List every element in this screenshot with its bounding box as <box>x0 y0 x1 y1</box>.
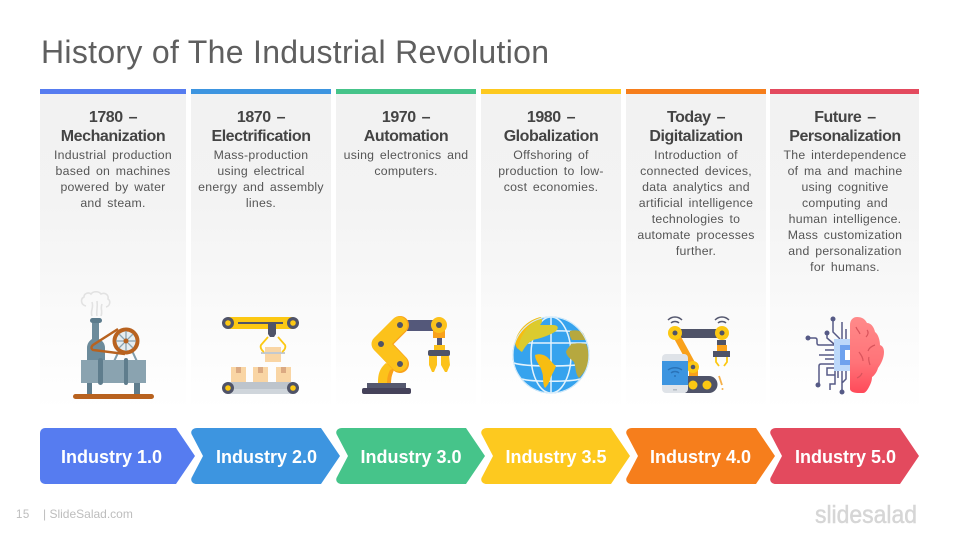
text: 1980 description: cost economies. <box>504 180 598 194</box>
text: Future description: computing and <box>802 196 888 210</box>
icon: globe <box>512 316 590 394</box>
text: Future description: human intelligence. <box>789 212 901 226</box>
arrow: Industry 3.0 <box>336 428 485 484</box>
footer: site name: | SlideSalad.com <box>43 507 133 521</box>
text: 1970 description: computers. <box>374 164 438 178</box>
text: Today description: technologies to <box>652 212 740 226</box>
heading: 1780 Mechanization: Mechanization <box>61 128 165 145</box>
arrow: Industry 2.0: Industry 2.0 <box>216 447 317 467</box>
heading: 1870 Electrification: 1870 – <box>237 109 286 126</box>
text: Today description: artificial intelligence <box>639 196 753 210</box>
panel: 1970 Automation <box>336 89 476 410</box>
text: Future description: The interdependence <box>784 148 906 162</box>
text: Future description: using cognitive <box>801 180 889 194</box>
text: Today description: further. <box>676 244 716 258</box>
heading: 1980 Globalization: 1980 – <box>527 109 576 126</box>
text: Future description: of ma and machine <box>788 164 902 178</box>
heading: 1970 Automation: Automation <box>364 128 448 145</box>
heading: 1780 Mechanization: 1780 – <box>89 109 138 126</box>
panel: Today Digitalization <box>626 89 766 410</box>
heading: 1970 Automation: 1970 – <box>382 109 431 126</box>
arrow: Industry 4.0 <box>626 428 775 484</box>
text: Today description: data analytics and <box>642 180 750 194</box>
heading: Future Personalization: Personalization <box>789 128 901 145</box>
icon: steam engine <box>73 292 154 399</box>
heading: Today Digitalization: Today – <box>667 109 726 126</box>
icon: brain chip <box>806 316 884 394</box>
arrow: Industry 3.5: Industry 3.5 <box>505 447 607 467</box>
text: 1980 description: Offshoring of <box>513 148 589 162</box>
logo: slidesalad: slidesalad <box>815 501 917 529</box>
heading: 1870 Electrification: Electrification <box>211 128 311 145</box>
text: 1970 description: using electronics and <box>344 148 468 162</box>
text: Today description: automate processes <box>637 228 755 242</box>
text: Future description: and personalization <box>788 244 902 258</box>
text: 1870 description: Mass-production <box>214 148 308 162</box>
text: 1870 description: using electrical <box>217 164 305 178</box>
text: Today description: Introduction of <box>654 148 738 162</box>
arrow: Industry 2.0 <box>191 428 340 484</box>
arrow: Industry 3.5 <box>481 428 630 484</box>
arrow: Industry 1.0: Industry 1.0 <box>61 447 162 467</box>
arrow: Industry 3.0: Industry 3.0 <box>360 447 462 467</box>
text: Today description: connected devices, <box>640 164 752 178</box>
heading: Future Personalization: Future – <box>814 109 876 126</box>
arrow: Industry 5.0 <box>770 428 919 484</box>
panel: 1980 Globalization <box>481 89 621 410</box>
icon: robot arm <box>362 317 450 394</box>
panel: Future Personalization <box>770 89 919 410</box>
panel: 1870 Electrification <box>191 89 331 410</box>
text: Future description: Mass customization <box>788 228 902 242</box>
text: 1870 description: lines. <box>246 196 276 210</box>
text: Future description: for humans. <box>810 260 880 274</box>
text: 1870 description: energy and assembly <box>198 180 324 194</box>
text: 1780 description: Industrial production <box>54 148 172 162</box>
arrow: Industry 5.0: Industry 5.0 <box>795 447 896 467</box>
text: 1780 description: powered by water <box>60 180 166 194</box>
arrow: Industry 1.0 <box>40 428 195 484</box>
text: 1780 description: and steam. <box>80 196 146 210</box>
icon: assembly line <box>222 317 299 394</box>
heading: 1980 Globalization: Globalization <box>504 128 598 145</box>
page number: 15 <box>16 509 30 521</box>
icon: connected robot <box>662 317 730 393</box>
text: 1780 description: based on machines <box>56 164 170 178</box>
arrow: Industry 4.0: Industry 4.0 <box>650 447 751 467</box>
title: History of The Industrial Revolution <box>41 34 549 70</box>
text: 1980 description: production to low- <box>498 164 604 178</box>
heading: Today Digitalization: Digitalization <box>649 128 743 145</box>
panel: 1780 Mechanization <box>40 89 186 410</box>
